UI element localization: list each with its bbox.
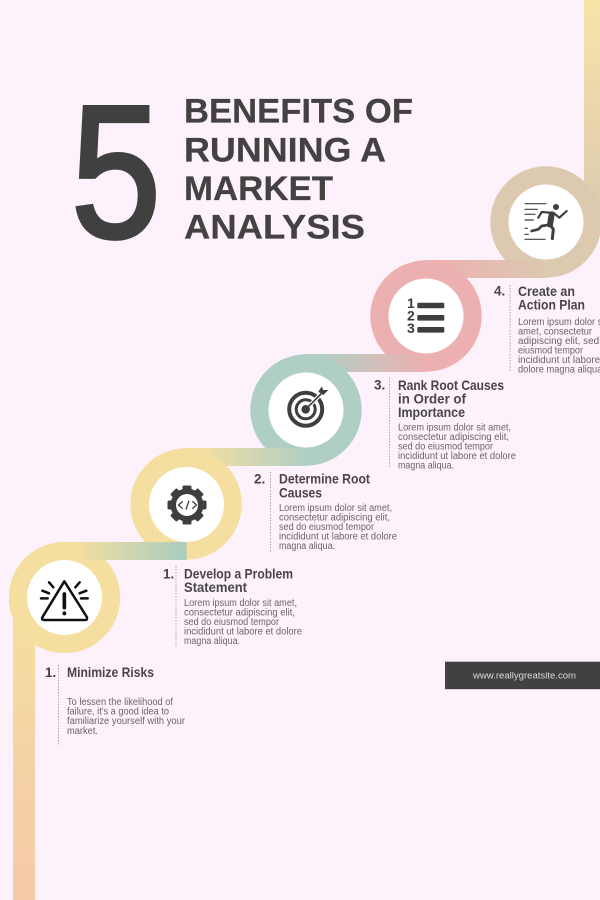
icon: target with arrow xyxy=(289,386,328,426)
benefit: Develop a Problem Statement: 1. xyxy=(163,566,174,581)
benefit: Create an Action Plan xyxy=(494,284,600,376)
title: BENEFITS OF xyxy=(184,93,413,131)
title xyxy=(184,93,413,246)
benefit: Create an Action Plan: eiusmod tempor xyxy=(518,346,584,356)
benefit: Develop a Problem Statement: Develop a Problem xyxy=(184,566,293,581)
benefit: Rank Root Causes in Order of Importance: incididunt ut labore et dolore xyxy=(398,451,517,462)
benefit: Determine Root Causes: Causes xyxy=(279,485,322,500)
benefit: Minimize Risks xyxy=(45,665,186,745)
benefit: Rank Root Causes in Order of Importance: in Order of xyxy=(398,392,466,407)
benefit: Create an Action Plan: Create an xyxy=(518,284,575,299)
benefit: Rank Root Causes in Order of Importance: Lorem ipsum dolor sit amet, xyxy=(398,422,511,434)
benefit: Rank Root Causes in Order of Importance: Rank Root Causes xyxy=(398,378,504,393)
benefit: Rank Root Causes in Order of Importance: 3. xyxy=(374,378,385,393)
benefit: Minimize Risks: To lessen the likelihood of xyxy=(67,697,173,708)
icon: warning triangle xyxy=(41,581,88,620)
benefit: Determine Root Causes: Determine Root xyxy=(279,472,370,487)
website footer tag: www.reallygreatsite.com xyxy=(472,670,576,680)
benefit: Develop a Problem Statement: consectetur adipiscing elit, xyxy=(184,608,295,618)
benefit: Develop a Problem Statement: incididunt ut labore et dolore xyxy=(184,627,303,638)
website footer tag xyxy=(445,662,600,689)
title: ANALYSIS xyxy=(184,208,365,246)
big number 5: 5 xyxy=(71,67,161,278)
benefit: Develop a Problem Statement xyxy=(163,566,303,647)
benefit: Determine Root Causes: 2. xyxy=(254,472,265,486)
benefit: Determine Root Causes: sed do eiusmod tempor xyxy=(279,522,375,533)
icon: numbered list: 3 xyxy=(407,320,415,336)
icon: numbered list xyxy=(407,295,444,336)
icon: gear with code symbol xyxy=(168,486,206,524)
title: RUNNING A xyxy=(184,132,386,170)
benefit: Determine Root Causes: incididunt ut labore et dolore xyxy=(279,532,398,542)
benefit: Rank Root Causes in Order of Importance xyxy=(374,378,517,472)
title: MARKET xyxy=(184,170,333,208)
icon: numbered list: 1 xyxy=(407,295,415,311)
benefit: Minimize Risks: Minimize Risks xyxy=(67,665,154,680)
benefit: Rank Root Causes in Order of Importance: magna aliqua. xyxy=(398,460,454,472)
benefit: Determine Root Causes: consectetur adipiscing elit, xyxy=(279,512,390,524)
benefit: Develop a Problem Statement: sed do eiusmod tempor xyxy=(184,617,280,628)
benefit: Create an Action Plan: Action Plan xyxy=(518,298,585,312)
benefit: Develop a Problem Statement: Lorem ipsum dolor sit amet, xyxy=(184,598,297,609)
benefit: Minimize Risks: market. xyxy=(67,726,98,737)
benefit: Develop a Problem Statement: Statement xyxy=(184,580,247,595)
benefit: Determine Root Causes: Lorem ipsum dolor sit amet, xyxy=(279,503,392,514)
benefit: Rank Root Causes in Order of Importance: sed do eiusmod tempor xyxy=(398,442,494,452)
benefit: Determine Root Causes: magna aliqua. xyxy=(279,541,335,552)
benefit: Develop a Problem Statement: magna aliqua. xyxy=(184,636,240,647)
benefit: Create an Action Plan: amet, consectetur xyxy=(518,327,593,338)
benefit: Rank Root Causes in Order of Importance: Importance xyxy=(398,405,465,420)
benefit: Determine Root Causes xyxy=(254,472,398,552)
benefit: Minimize Risks: 1. xyxy=(45,665,56,680)
benefit: Create an Action Plan: 4. xyxy=(494,284,505,299)
benefit: Rank Root Causes in Order of Importance: consectetur adipiscing elit, xyxy=(398,432,509,443)
icon: numbered list: 2 xyxy=(407,308,415,324)
benefit: Minimize Risks: familiarize yourself with your xyxy=(67,716,186,727)
benefit: Minimize Risks: failure, it's a good idea to xyxy=(67,707,170,718)
icon: running person xyxy=(525,204,567,239)
